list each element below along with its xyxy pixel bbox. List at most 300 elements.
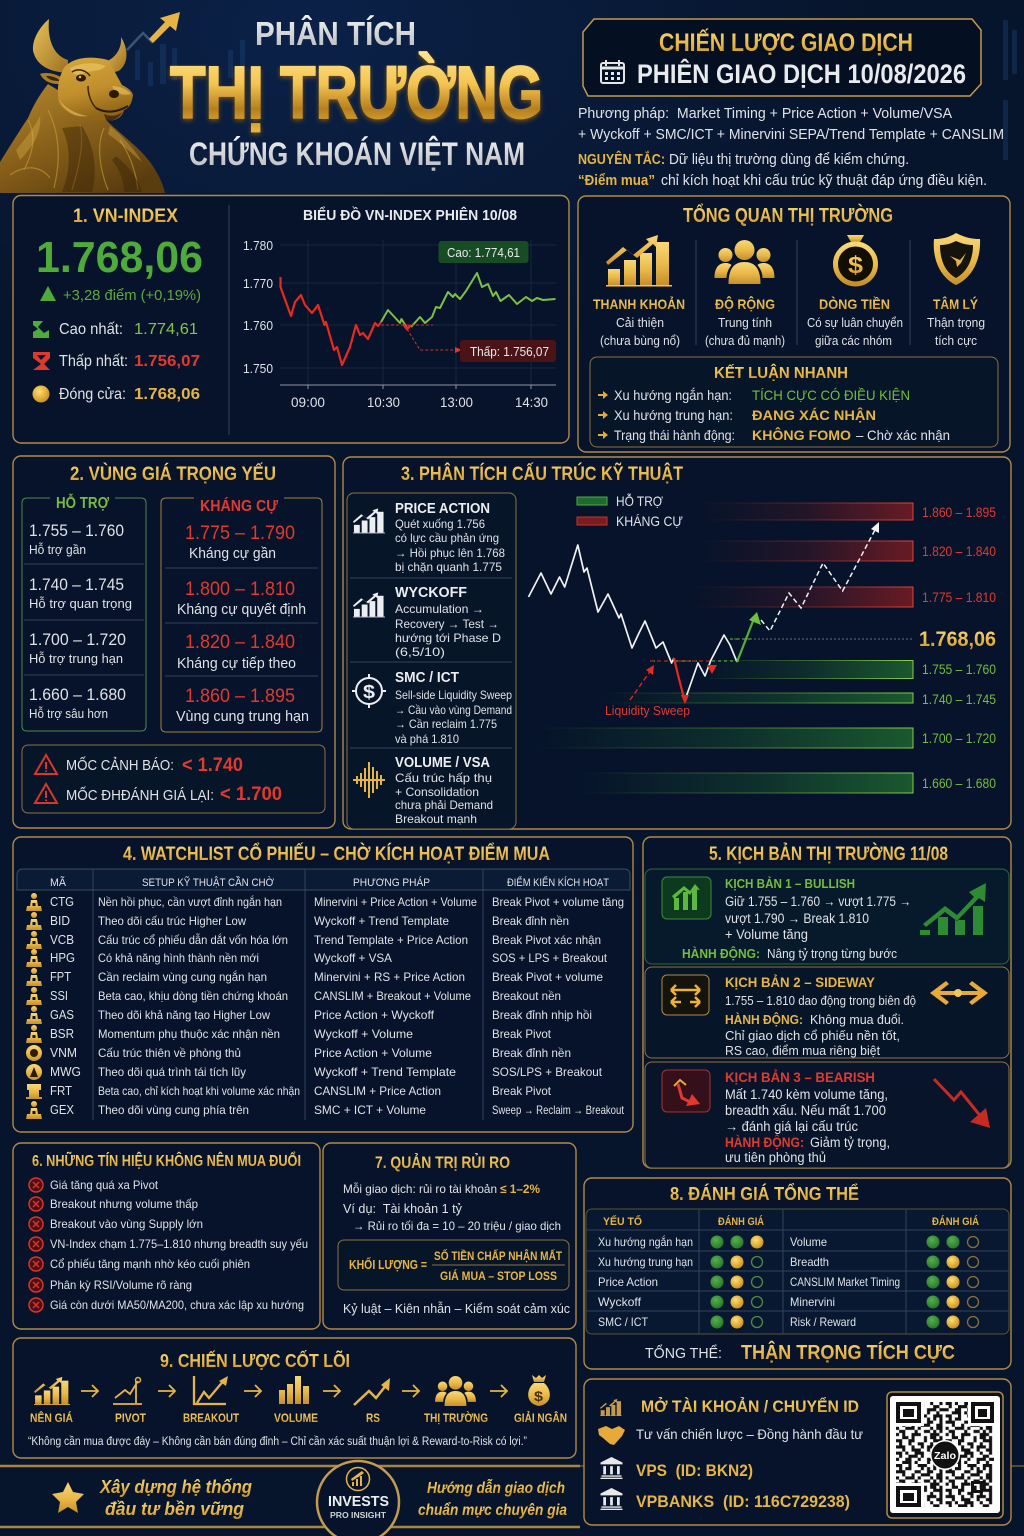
item: breadth: ĐỘ RỘNG [715, 295, 775, 312]
slogan right: chuẩn mực chuyên gia [418, 1501, 567, 1519]
warning box [22, 745, 325, 813]
setup column: Momentum phụ thuộc xác nhận nền [98, 1027, 280, 1041]
icon: dollar target [352, 674, 386, 708]
x-axis labels: 09:00 [291, 394, 325, 410]
zone labels: 1.860 – 1.895 [922, 504, 996, 520]
y-axis labels: 1.780 [243, 238, 273, 253]
wyckoff [395, 585, 501, 659]
methods box [347, 493, 516, 829]
close number: 1.768,06 [134, 386, 200, 403]
method column: Wyckoff + Trend Template [314, 914, 449, 928]
badge: invests pro insight: INVESTS [328, 1494, 389, 1510]
resistance column: 1.860 – 1.895 [185, 686, 295, 707]
panel: 6. do not chase [13, 1143, 320, 1329]
right criteria: Volume [790, 1235, 827, 1249]
legend [577, 492, 683, 529]
heading: MỞ TÀI KHOẢN / CHUYỂN ID [641, 1397, 859, 1416]
legend: HỖ TRỢ [616, 492, 663, 509]
item: liquidity [593, 296, 685, 348]
high value: 1.774,61 [134, 321, 198, 338]
panel frame [578, 196, 1010, 452]
buy point label: “Điểm mua” [578, 173, 655, 189]
trigger column: Break đỉnh nhịp hồi [492, 1008, 592, 1022]
icon: money bag [836, 235, 876, 284]
resistance column: 1.800 – 1.810 [185, 579, 295, 600]
sweep label: Liquidity Sweep [605, 704, 690, 718]
heading: 9. CHIẾN LƯỢC CỐT LÕI [160, 1350, 350, 1371]
zone labels: 1.768,06 [919, 628, 996, 651]
trigger column: Breakout nền [492, 989, 561, 1003]
trigger column: Break Pivot [492, 1027, 552, 1041]
left criteria: Wyckoff [598, 1295, 642, 1309]
setup column: Theo dõi cấu trúc Higher Low [98, 914, 246, 928]
support column: 1.755 – 1.760 [29, 521, 124, 540]
ticker symbols: HPG [50, 950, 75, 965]
header: method notes [578, 105, 1004, 189]
card: bearish: breadth xấu. Nếu mất 1.700 [725, 1103, 886, 1118]
icon: falling arrow [934, 1079, 990, 1128]
setup column: Cấu trúc cổ phiếu dẫn dắt vốn hóa lớn [98, 932, 288, 947]
panel: 8. overall assessment [584, 1178, 1011, 1369]
support column: Hỗ trợ gần [29, 542, 86, 557]
quote: “Không cần mua được đáy – Không cần bán đúng đỉnh – Chỉ cần xác suất thuận lợi & Reward-to-Risk có lợi.” [28, 1436, 527, 1448]
resistance column: KHÁNG CỰ [200, 498, 278, 515]
item: money flow: giữa các nhóm [815, 334, 892, 348]
heading: 2. VÙNG GIÁ TRỌNG YẾU [70, 461, 276, 485]
icon: warning [35, 784, 57, 803]
support zones [535, 660, 913, 793]
card: bullish: HÀNH ĐỘNG: [682, 946, 760, 961]
table header: YẾU TỐ [603, 1214, 642, 1228]
item: sentiment: Thận trọng [927, 316, 985, 330]
card: bullish [645, 869, 1009, 964]
trigger column: SOS/LPS + Breakout [492, 1065, 603, 1079]
medium-term row: Xu hướng trung hạn: [614, 407, 733, 423]
setup column: Beta cao, chỉ kích hoạt khi volume xác nhận [98, 1084, 300, 1098]
ticker symbols [50, 894, 81, 1117]
right criteria: Breadth [790, 1255, 829, 1269]
wyckoff: Accumulation → [395, 602, 484, 616]
item: liquidity: THANH KHOẢN [593, 296, 685, 312]
discipline line: Kỷ luật – Kiên nhẫn – Kiểm soát cảm xúc [343, 1301, 570, 1316]
volume vsa: Breakout mạnh [395, 812, 477, 826]
legend: KHÁNG CỰ [616, 513, 683, 529]
slogan left [99, 1477, 252, 1519]
setup column: Có khả năng hình thành nền mới [98, 951, 259, 965]
support column: 1.700 – 1.720 [29, 630, 126, 649]
heading: 5. KỊCH BẢN THỊ TRƯỜNG 11/08 [709, 843, 948, 865]
warning box: < 1.740 [182, 755, 243, 776]
conclusion heading: KẾT LUẬN NHANH [714, 363, 848, 382]
icon: handshake [598, 1426, 625, 1445]
card: bearish: Mất 1.740 kèm volume tăng, [725, 1087, 888, 1102]
step: deploy capital [514, 1375, 567, 1425]
step arrows [81, 1385, 507, 1397]
ticker symbols: FPT [50, 969, 71, 984]
short-term row: Xu hướng ngắn hạn: [614, 387, 732, 403]
y-axis labels [243, 238, 273, 376]
example [343, 1201, 561, 1233]
table frame [17, 869, 630, 1120]
position size formula: GIÁ MUA – STOP LOSS [440, 1268, 557, 1283]
risk rule: ≤ 1–2% [500, 1182, 540, 1196]
card: bullish: vượt 1.790 → Break 1.810 [725, 911, 869, 926]
card: bearish: HÀNH ĐỘNG: [725, 1135, 804, 1150]
setup column: Beta cao, khịu dòng tiền chứng khoán [98, 989, 288, 1003]
card: bullish: Nâng tỷ trọng từng bước [767, 946, 897, 961]
arrow head [149, 12, 180, 43]
chart heading: BIỂU ĐỒ VN-INDEX PHIÊN 10/08 [303, 206, 517, 224]
right criteria: CANSLIM Market Timing [790, 1275, 900, 1289]
zone labels: 1.740 – 1.745 [922, 691, 996, 707]
conclusion box [590, 357, 998, 447]
icon: bank [600, 1457, 622, 1479]
heading: 8. ĐÁNH GIÁ TỔNG THỂ [670, 1183, 859, 1204]
left criteria: Price Action [598, 1275, 658, 1289]
overall label: TỔNG THỂ: [645, 1344, 722, 1362]
step: market: THỊ TRƯỜNG [424, 1410, 488, 1425]
low label: Thấp nhất: [59, 353, 128, 370]
step: relative strength: RS [366, 1411, 380, 1425]
header: session box [583, 19, 981, 96]
step: relative strength [354, 1378, 390, 1425]
trigger column: Break Pivot + volume tăng [492, 895, 624, 909]
trigger column: Break Pivot xác nhận [492, 933, 601, 947]
qr code: Zalo [934, 1451, 956, 1462]
resistance column: Vùng cung trung hạn [176, 709, 309, 725]
resistance column: 1.820 – 1.840 [185, 632, 295, 653]
panel frame [323, 1143, 576, 1329]
setup column: Theo dõi vùng cung phía trên [98, 1103, 249, 1117]
setup column [98, 894, 300, 1117]
card: bullish: Giữ 1.755 – 1.760 → vượt 1.775 → [725, 894, 911, 909]
support column: 1.660 – 1.680 [29, 685, 126, 704]
icon: shield [934, 233, 980, 285]
buy point text: chỉ kích hoạt khi cấu trúc kỹ thuật đáp ứng điều kiện. [661, 173, 987, 189]
heading: 4. WATCHLIST CỔ PHIẾU – CHỜ KÍCH HOẠT ĐIỂM MUA [123, 843, 550, 865]
y-axis labels: 1.750 [243, 361, 273, 376]
smc ict: và phá 1.810 [395, 732, 459, 746]
card: sideway: KỊCH BẢN 2 – SIDEWAY [725, 974, 876, 990]
item: money flow [807, 295, 903, 348]
left criteria [598, 1234, 693, 1329]
panel: contact [584, 1379, 1011, 1525]
slogan left: đầu tư bền vững [105, 1499, 244, 1519]
icon: sideway [662, 975, 709, 1015]
high label: Cao nhất: [59, 321, 123, 338]
card: sideway: 1.755 – 1.810 dao động trong biên độ [725, 993, 916, 1008]
ticker symbols: SSI [50, 988, 68, 1003]
panel frame [13, 1338, 576, 1458]
x-axis labels [291, 394, 548, 410]
table header: ĐÁNH GIÁ [932, 1215, 979, 1228]
item: money flow: Có sự luân chuyển [807, 316, 903, 330]
panel: 1. VN-Index [13, 196, 569, 443]
panel: 3. technical structure [343, 457, 1011, 829]
zone labels: 1.820 – 1.840 [922, 543, 996, 559]
right criteria: Minervini [790, 1295, 835, 1309]
item: breadth: Trung tính [718, 316, 772, 330]
icon: rising arrow [127, 33, 158, 50]
signal list: Breakout vào vùng Supply lớn [50, 1217, 203, 1231]
faint candles [135, 20, 1017, 160]
x-axis labels: 13:00 [440, 394, 473, 410]
card: bullish: KỊCH BẢN 1 – BULLISH [725, 876, 855, 891]
qr code [887, 1392, 1003, 1518]
volume vsa: + Consolidation [395, 785, 479, 799]
icon: star [52, 1482, 84, 1513]
low tag: Thấp: 1.756,07 [470, 344, 549, 359]
action row: – Chờ xác nhận [856, 427, 950, 443]
position size formula [338, 1240, 569, 1290]
high tag [438, 241, 528, 263]
wyckoff: (6,5/10) [395, 645, 445, 659]
warning box: MỐC CẢNH BÁO: [66, 756, 174, 774]
icon: liquidity bars [606, 235, 672, 287]
support column [22, 494, 146, 731]
support column: Hỗ trợ sâu hơn [29, 706, 108, 721]
trigger column: Break đỉnh nền [492, 1046, 571, 1060]
left criteria: Xu hướng ngắn hạn [598, 1234, 693, 1249]
resistance column: Kháng cự tiếp theo [177, 656, 296, 672]
card: sideway: Chỉ giao dịch cổ phiếu nền tốt, [725, 1028, 900, 1043]
table header [603, 1214, 979, 1228]
method column: Wyckoff + VSA [314, 951, 392, 965]
step: deploy capital: GIẢI NGÂN [514, 1410, 567, 1425]
panel frame [584, 1178, 1011, 1369]
volume vsa [395, 755, 493, 826]
right criteria: Risk / Reward [790, 1315, 856, 1329]
step: pivot: PIVOT [115, 1411, 147, 1425]
close value: 1.768,06 [36, 233, 203, 282]
heading: 7. QUẢN TRỊ RỦI RO [375, 1153, 510, 1172]
item: breadth: (chưa đủ mạnh) [705, 334, 785, 348]
price action: Quét xuống 1.756 [395, 517, 485, 531]
price action: PRICE ACTION [395, 501, 490, 517]
item: sentiment: TÂM LÝ [933, 295, 979, 312]
smc ict: Sell-side Liquidity Sweep [395, 688, 512, 702]
method line 2: + Wyckoff + SMC/ICT + Minervini SEPA/Trend Template + CANSLIM [578, 126, 1004, 143]
ticker symbols: FRT [50, 1083, 72, 1098]
left criteria: Xu hướng trung hạn [598, 1255, 693, 1269]
step: volume [274, 1376, 318, 1425]
ticker icons [26, 893, 42, 1119]
trigger column: Break đỉnh nền [492, 914, 569, 928]
signal list: Cổ phiếu tăng mạnh nhờ kéo cuối phiên [50, 1257, 250, 1271]
icon: money bag: $ [848, 252, 864, 279]
table header: ĐÁNH GIÁ [718, 1215, 764, 1228]
heading: TỔNG QUAN THỊ TRƯỜNG [683, 203, 893, 227]
title line 3: CHỨNG KHOÁN VIỆT NAM [189, 136, 525, 172]
step: breakout [183, 1376, 240, 1425]
item: sentiment: tích cực [935, 334, 977, 348]
structure chart [528, 522, 913, 704]
zone labels: 1.775 – 1.810 [922, 589, 996, 605]
item: liquidity: (chưa bùng nổ) [600, 334, 680, 348]
signal list: Giá còn dưới MA50/MA200, chưa xác lập xu hướng [50, 1298, 304, 1312]
medium-term row [614, 406, 876, 423]
icon: warning [35, 755, 57, 774]
table frame [586, 1209, 1009, 1334]
badge: invests pro insight: PRO INSIGHT [330, 1511, 386, 1520]
panel: 9. core strategy [13, 1338, 576, 1458]
support column: HỖ TRỢ [56, 494, 110, 512]
signal list [50, 1178, 308, 1312]
heading: 1. VN-INDEX [73, 206, 178, 227]
resistance column: 1.775 – 1.790 [185, 523, 295, 544]
panel frame [343, 457, 1011, 829]
icon: low [33, 352, 50, 370]
high tag: Cao: 1.774,61 [447, 245, 520, 260]
x-axis labels: 14:30 [515, 394, 548, 410]
title line 2: THỊ TRƯỜNG [170, 51, 543, 134]
resistance column [161, 498, 322, 732]
badge: invests pro insight [317, 1461, 399, 1536]
step: candles [30, 1377, 73, 1425]
setup column: Nền hồi phục, cần vượt đỉnh ngắn hạn [98, 894, 282, 909]
left criteria: SMC / ICT [598, 1315, 649, 1329]
smc ict: → Cầu vào vùng Demand [395, 703, 512, 717]
panel frame [13, 196, 569, 443]
action row: Trạng thái hành động: [614, 427, 735, 443]
rating dots [710, 1236, 978, 1328]
step: breakout: BREAKOUT [183, 1411, 240, 1425]
method column: Minervini + Price Action + Volume [314, 895, 477, 909]
slogan left: Xây dựng hệ thống [99, 1477, 252, 1497]
smc ict: SMC / ICT [395, 670, 459, 686]
icon: waveform [353, 762, 385, 798]
principle text: Dữ liệu thị trường dùng để kiểm chứng. [669, 152, 909, 168]
position size formula: SỐ TIỀN CHẤP NHẬN MẤT [434, 1248, 563, 1263]
setup column: Cấu trúc thiên về phòng thủ [98, 1046, 241, 1060]
bull right horn [105, 37, 126, 72]
step: candles: NÊN GIÁ [30, 1410, 73, 1425]
arrows [598, 391, 608, 439]
band frame [0, 1466, 580, 1527]
panel frame [13, 1143, 320, 1329]
zone labels: 1.660 – 1.680 [922, 775, 996, 791]
method column: Wyckoff + Trend Template [314, 1065, 456, 1079]
action row: KHÔNG FOMO [752, 426, 851, 443]
smc ict [395, 670, 512, 746]
bull body [0, 84, 165, 193]
example: → Rủi ro tối đa = 10 – 20 triệu / giao dịch [353, 1219, 561, 1233]
card: bullish: + Volume tăng [725, 927, 808, 942]
icon: people [714, 240, 774, 284]
wyckoff: hướng tới Phase D [395, 631, 501, 645]
icon: dollar target: $ [363, 682, 375, 702]
short-term row [614, 387, 910, 403]
panel frame [13, 837, 633, 1132]
signal list: VN-Index chạm 1.775–1.810 nhưng breadth suy yếu [50, 1237, 308, 1251]
resistance zones [690, 503, 913, 607]
support column: Hỗ trợ trung hạn [29, 651, 123, 666]
item: money flow: DÒNG TIỀN [819, 295, 890, 312]
resistance column: Kháng cự gần [189, 546, 276, 562]
ticker symbols: VNM [50, 1045, 77, 1060]
volume vsa: Cấu trúc hấp thụ [395, 771, 492, 785]
ticker symbols: VCB [50, 932, 74, 947]
table header: PHƯƠNG PHÁP [353, 876, 430, 889]
method column: CANSLIM + Breakout + Volume [314, 989, 471, 1003]
setup column: Cần reclaim vùng cung ngắn hạn [98, 969, 267, 984]
icon: golden bull [0, 19, 165, 193]
card: bearish: → đánh giá lại cấu trúc [725, 1119, 858, 1134]
card: bearish: Giảm tỷ trọng, [810, 1135, 890, 1150]
y-axis labels: 1.760 [243, 318, 273, 333]
bull head [58, 58, 133, 121]
line chart [280, 240, 556, 389]
trigger column [492, 895, 625, 1117]
right criteria [790, 1235, 900, 1329]
method column [314, 895, 477, 1117]
trigger column: SOS + LPS + Breakout [492, 951, 608, 965]
bull left horn [33, 19, 68, 73]
panel: 4. watchlist [13, 837, 633, 1132]
short-term row: TÍCH CỰC CÓ ĐIỀU KIỆN [752, 387, 910, 403]
icon: bars [353, 508, 385, 533]
method column: Price Action + Wyckoff [314, 1008, 435, 1022]
icon: bullish [662, 877, 711, 919]
principle label: NGUYÊN TẮC: [578, 150, 665, 168]
ticker symbols: MWG [50, 1064, 81, 1079]
bull ear [40, 73, 64, 84]
price action: có lực cầu phản ứng [395, 531, 499, 545]
card: sideway: HÀNH ĐỘNG: [725, 1012, 803, 1027]
wyckoff: Recovery → Test → [395, 617, 499, 631]
session heading: CHIẾN LƯỢC GIAO DỊCH [659, 28, 913, 57]
signal list: Phân kỳ RSI/Volume rõ ràng [50, 1278, 192, 1292]
icon: bank [600, 1488, 622, 1510]
overall verdict: THẬN TRỌNG TÍCH CỰC [741, 1340, 955, 1364]
ticker symbols: BSR [50, 1026, 74, 1041]
step: market [424, 1376, 488, 1425]
change: +3,28 điểm (+0,19%) [63, 287, 201, 304]
heading: 3. PHÂN TÍCH CẤU TRÚC KỸ THUẬT [401, 461, 683, 485]
item: breadth [705, 295, 785, 348]
action row [614, 426, 950, 443]
title line 1: PHÂN TÍCH [255, 15, 416, 52]
slogan right [418, 1477, 567, 1519]
ticker symbols: BID [50, 913, 70, 928]
ticker symbols: CTG [50, 894, 74, 909]
x-axis labels: 10:30 [367, 394, 400, 410]
position size formula: KHỐI LƯỢNG = [349, 1257, 427, 1272]
table header: SETUP KỸ THUẬT CẦN CHỜ [142, 876, 275, 889]
y-axis labels: 1.770 [243, 276, 273, 291]
price action [395, 501, 505, 574]
panel frame [584, 1379, 1011, 1525]
method column: Price Action + Volume [314, 1046, 432, 1060]
step: pivot [113, 1378, 147, 1425]
panel: 7. risk management [323, 1143, 576, 1329]
panel: 2. key price zones [13, 456, 335, 828]
low tag [460, 340, 556, 362]
ticker symbols: GAS [50, 1007, 74, 1022]
price action: → Hồi phục lên 1.768 [395, 546, 505, 560]
item: liquidity: Cải thiện [616, 316, 664, 330]
setup column: Theo dõi khả năng tạo Higher Low [98, 1008, 270, 1022]
broker VPS: VPS (ID: BKN2) [636, 1461, 753, 1480]
zone labels [919, 504, 996, 791]
icon: close coin [32, 386, 50, 402]
table header: MÃ [50, 876, 67, 889]
resistance column: Kháng cự quyết định [177, 602, 306, 618]
low value: 1.756,07 [134, 353, 200, 370]
volume vsa: VOLUME / VSA [395, 755, 490, 771]
method line 1: Phương pháp: Market Timing + Price Action + Volume/VSA [578, 105, 952, 122]
icon: bearish [662, 1070, 710, 1112]
